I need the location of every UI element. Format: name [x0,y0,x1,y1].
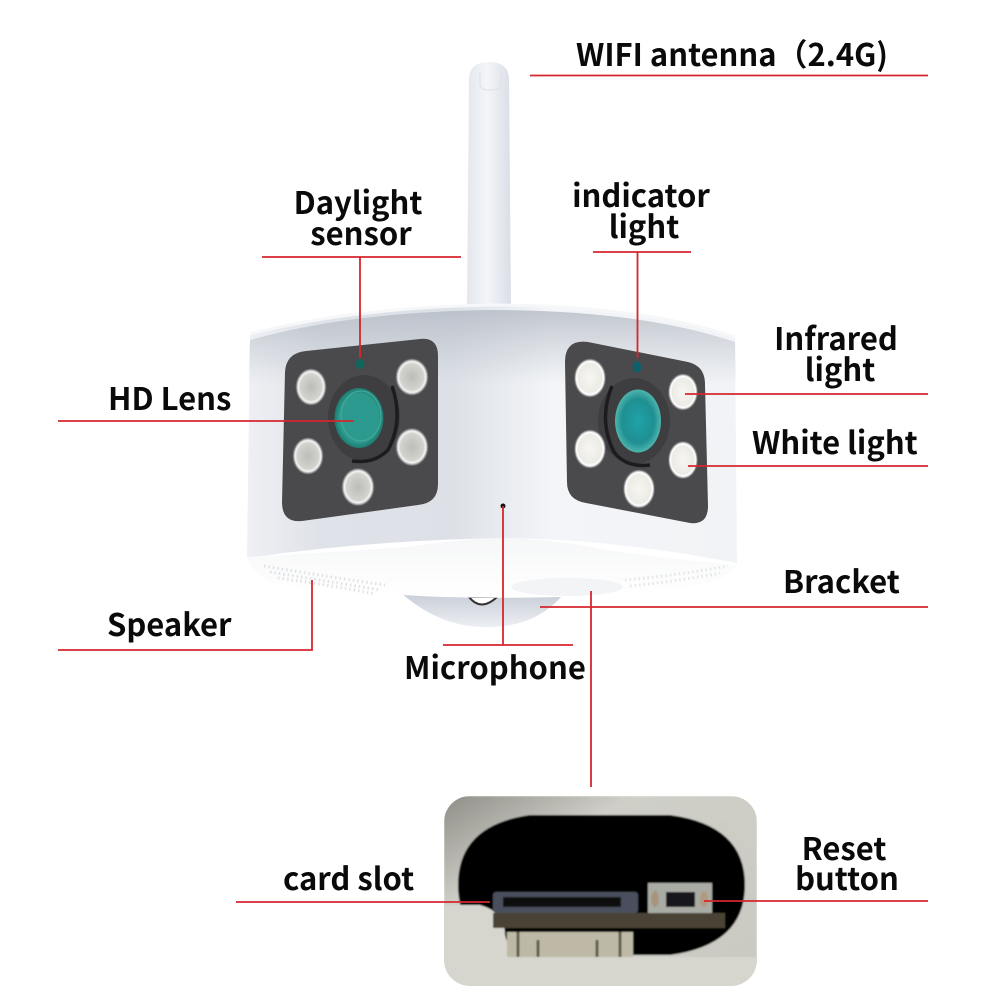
label: Daylight sensor [294,178,422,254]
camera body [247,305,737,627]
label: indicator light: indicator [572,171,710,216]
infrared LEDs [293,359,428,506]
label: HD Lens: HD Lens [108,374,231,419]
camera housing [247,305,737,563]
label: card slot: card slot [283,854,414,899]
label: Infrared light: Infrared [774,314,898,359]
callout lines [58,76,928,902]
daylight sensor [356,359,364,369]
HD lens [334,388,384,448]
panel: left lens module [282,339,438,521]
bracket [400,592,562,627]
label: Daylight sensor: sensor [310,209,412,254]
icon: WIFI antenna [467,62,511,306]
label: indicator light [572,171,710,247]
panel: right lens module [565,342,708,523]
label: Reset button: Reset [802,824,886,869]
label: WIFI antenna: WIFI antenna（2.4G) [576,30,888,75]
photo: card slot and reset button [440,796,760,990]
label: Reset button: button [795,854,899,899]
label: indicator light: light [609,202,679,247]
label: Microphone: Microphone [404,643,586,688]
label: Reset button [795,824,899,899]
label: Infrared light: light [805,345,875,390]
label: White light: White light [752,418,918,463]
white and infrared LEDs [574,359,698,508]
label: Speaker: Speaker [107,600,232,645]
HD lens right [615,390,661,452]
speaker underside [247,538,737,598]
icon: microphone hole [500,504,506,508]
label: Bracket: Bracket [783,557,900,602]
indicator light dot [632,362,642,372]
label: Infrared light [774,314,898,390]
label: Daylight sensor: Daylight [294,178,422,223]
